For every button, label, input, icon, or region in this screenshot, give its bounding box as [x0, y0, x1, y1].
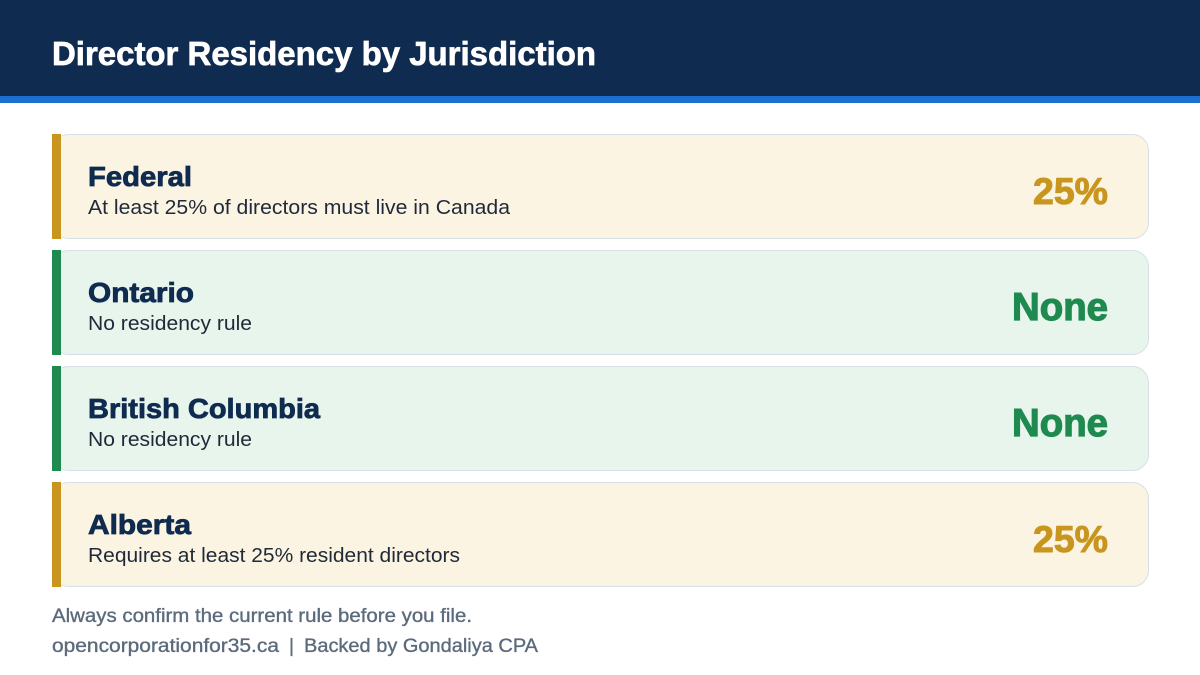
- Alberta description: Requires at least 25% resident directors: [88, 544, 460, 567]
- panel: British Columbia: [52, 366, 1148, 471]
- panel: Alberta: [52, 482, 1148, 587]
- British Columbia value: None: [1012, 402, 1108, 445]
- panel: Ontario: [52, 250, 1148, 355]
- Federal value: 25%: [1033, 171, 1108, 212]
- British Columbia description: No residency rule: [88, 428, 252, 451]
- header banner: [0, 0, 1200, 103]
- footer source line: opencorporationfor35.ca: [52, 636, 279, 657]
- footer note: Always confirm the current rule before you file.: [52, 606, 472, 627]
- footer source line: |: [289, 636, 294, 657]
- British Columbia name: British Columbia: [88, 393, 320, 424]
- Alberta value: 25%: [1033, 519, 1108, 560]
- Ontario name: Ontario: [88, 277, 194, 308]
- footer source line: Backed by Gondaliya CPA: [304, 636, 538, 657]
- Alberta name: Alberta: [88, 509, 191, 540]
- footer source line: [52, 636, 538, 657]
- panel: Federal: [52, 134, 1148, 239]
- Federal description: At least 25% of directors must live in Canada: [88, 196, 511, 219]
- Ontario description: No residency rule: [88, 312, 252, 335]
- Ontario value: None: [1012, 286, 1108, 329]
- Federal name: Federal: [88, 161, 192, 192]
- title: Director Residency by Jurisdiction: [52, 35, 596, 72]
